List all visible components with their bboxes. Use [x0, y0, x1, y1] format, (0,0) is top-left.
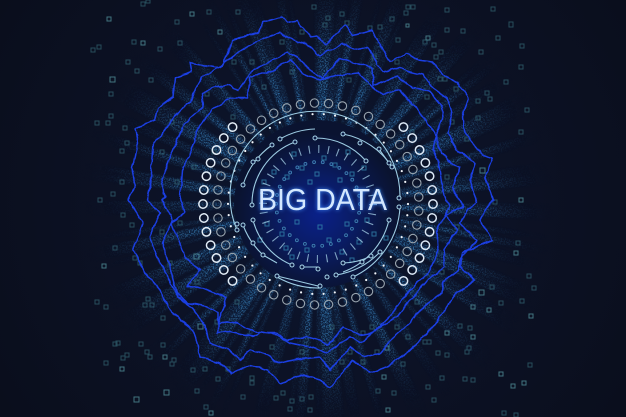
contour line 1 (outer)	[128, 17, 493, 387]
small circle ring, hollow centre	[276, 162, 360, 246]
scattered data squares	[91, 0, 536, 417]
particle burst rays	[108, 0, 528, 415]
infographic: big data radial visual	[90, 0, 536, 417]
middle circuit arcs	[243, 129, 392, 275]
contour line 3	[162, 52, 463, 353]
inner circuit arcs	[252, 138, 389, 286]
small circle ring, outline	[276, 162, 360, 246]
squares: bright	[102, 12, 533, 415]
contour line 4 (inner)	[172, 60, 449, 345]
title: BIG DATA	[258, 182, 387, 217]
circuit end nodes	[235, 132, 401, 288]
squares: inner core	[258, 150, 388, 262]
circuit arcs	[230, 111, 400, 288]
ring: white dots	[228, 114, 408, 294]
central dark blue disc	[234, 120, 402, 288]
squares: dim	[91, 0, 536, 417]
ring: white hollow circles, right arc	[398, 121, 437, 287]
contour line 2	[147, 32, 477, 370]
blue radial tint	[164, 46, 476, 361]
tick ring	[263, 149, 373, 259]
outer circuit arcs	[230, 111, 400, 288]
ring: grey hollow circles	[213, 99, 423, 309]
ring: white hollow circles, left arc	[199, 121, 238, 287]
wavy blue contour lines	[128, 17, 493, 387]
